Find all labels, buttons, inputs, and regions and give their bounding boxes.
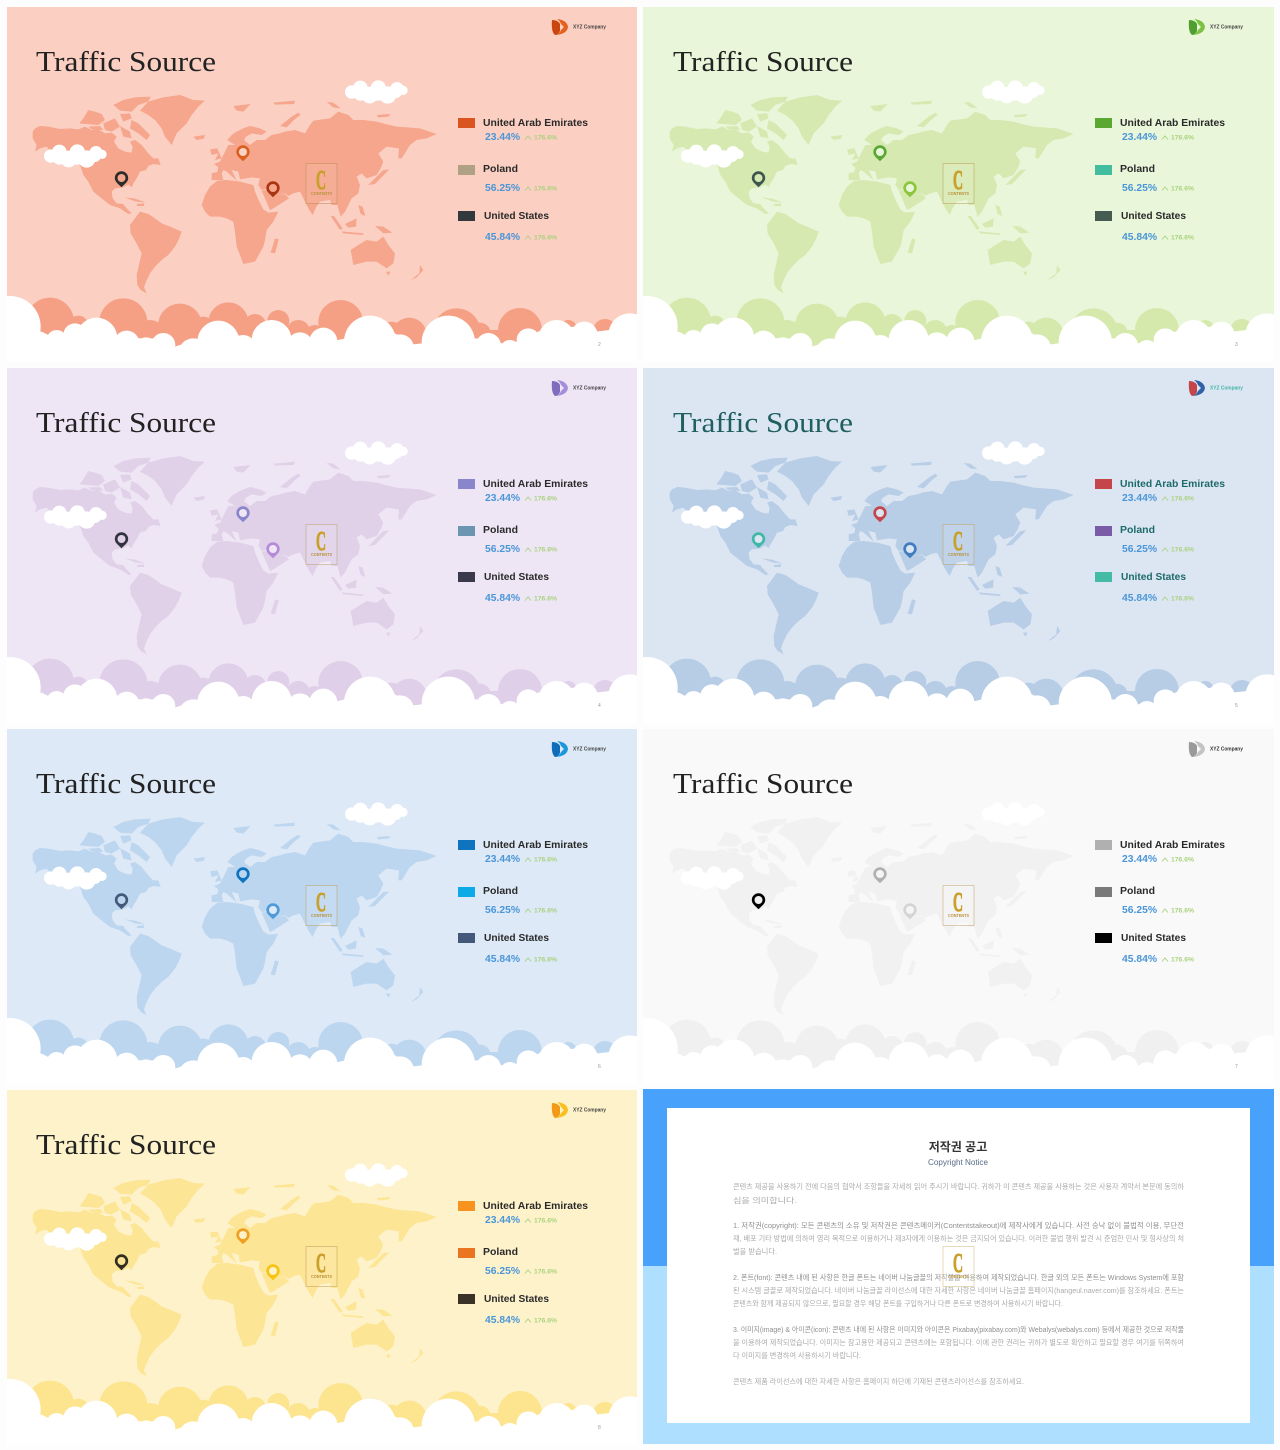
watermark: C bbox=[953, 165, 963, 195]
watermark bbox=[943, 886, 974, 926]
bottom clouds bbox=[0, 1018, 652, 1091]
legend: 56.25% bbox=[485, 904, 521, 916]
copyright body text: 다 이미지를 변경하여 사용하시기 바랍니다. bbox=[733, 1351, 861, 1360]
logo bbox=[1189, 19, 1243, 35]
legend: United Arab Emirates bbox=[1120, 478, 1225, 490]
title: Traffic Source bbox=[673, 768, 853, 800]
pin: United Arab Emirates bbox=[266, 542, 280, 558]
legend: Poland bbox=[1120, 524, 1155, 536]
title: Traffic Source bbox=[673, 407, 853, 439]
small clouds bbox=[44, 1163, 408, 1251]
logo: XYZ Company bbox=[573, 24, 606, 30]
watermark: CONTENTS bbox=[311, 913, 332, 918]
logo: XYZ Company bbox=[1210, 386, 1243, 392]
small clouds bbox=[44, 441, 408, 529]
legend: 176.6% bbox=[534, 496, 558, 502]
legend: 56.25% bbox=[1122, 182, 1158, 194]
legend: Poland bbox=[1120, 885, 1155, 897]
legend: 176.6% bbox=[534, 858, 558, 864]
panel: purple traffic source slide bbox=[0, 368, 652, 730]
copyright heading: 저작권 공고 bbox=[929, 1139, 987, 1154]
legend: 176.6% bbox=[534, 908, 558, 914]
legend: 176.6% bbox=[1171, 858, 1195, 864]
legend: United States bbox=[484, 932, 549, 944]
legend: Poland bbox=[483, 1246, 518, 1258]
legend: United Arab Emirates bbox=[483, 478, 588, 490]
copyright body text: 벌을 받습니다. bbox=[733, 1247, 777, 1256]
page number: 8 bbox=[598, 1425, 601, 1431]
copyright body text: 콘텐츠 제품 라이선스에 대한 자세한 사항은 홈페이지 하단에 기재된 콘텐츠라이선스를 참조하세요. bbox=[733, 1377, 1024, 1386]
legend bbox=[1095, 478, 1225, 604]
legend: United Arab Emirates bbox=[1120, 117, 1225, 129]
panel: green traffic source slide bbox=[616, 7, 1280, 369]
legend: United Arab Emirates bbox=[483, 1200, 588, 1212]
legend: 176.6% bbox=[534, 136, 558, 142]
small clouds bbox=[681, 80, 1045, 168]
title: Traffic Source bbox=[36, 768, 216, 800]
legend bbox=[458, 1200, 588, 1326]
legend: 23.44% bbox=[485, 1214, 521, 1226]
legend: 23.44% bbox=[1122, 492, 1158, 504]
legend: United States bbox=[484, 1293, 549, 1305]
watermark bbox=[306, 1246, 337, 1286]
pin: United Arab Emirates bbox=[903, 542, 917, 558]
logo bbox=[552, 741, 606, 757]
copyright body text: 심을 의미합니다. bbox=[733, 1196, 797, 1205]
watermark: C bbox=[316, 887, 326, 917]
legend: 176.6% bbox=[534, 236, 558, 242]
watermark bbox=[943, 1246, 974, 1286]
legend: 56.25% bbox=[485, 543, 521, 555]
legend: 45.84% bbox=[485, 592, 521, 604]
legend: 176.6% bbox=[534, 1318, 558, 1324]
legend: United States bbox=[1121, 210, 1186, 222]
page number: 2 bbox=[598, 342, 601, 348]
legend: 176.6% bbox=[1171, 236, 1195, 242]
legend: 176.6% bbox=[534, 186, 558, 192]
panel: yellow traffic source slide bbox=[0, 1090, 652, 1450]
logo bbox=[552, 380, 606, 396]
panel: sky blue traffic source slide bbox=[0, 729, 652, 1091]
pin: United Arab Emirates bbox=[266, 903, 280, 919]
legend: United States bbox=[484, 571, 549, 583]
small clouds bbox=[44, 802, 408, 890]
legend: 23.44% bbox=[485, 492, 521, 504]
watermark bbox=[306, 886, 337, 926]
bottom clouds bbox=[0, 296, 652, 369]
panel: copyright notice slide bbox=[643, 1089, 1274, 1444]
watermark: C bbox=[316, 526, 326, 556]
logo bbox=[1189, 380, 1243, 396]
legend: Poland bbox=[1120, 163, 1155, 175]
pin: Poland bbox=[236, 1228, 250, 1244]
watermark: C bbox=[316, 1248, 326, 1278]
pin: United States bbox=[115, 532, 128, 548]
small clouds bbox=[681, 802, 1045, 890]
legend: 45.84% bbox=[485, 1314, 521, 1326]
world map bbox=[670, 456, 1074, 654]
small clouds bbox=[681, 441, 1045, 529]
watermark bbox=[943, 164, 974, 204]
legend: 176.6% bbox=[1171, 548, 1195, 554]
panel: grey traffic source slide bbox=[616, 729, 1280, 1091]
title: Traffic Source bbox=[36, 46, 216, 78]
page number: 7 bbox=[1235, 1064, 1238, 1070]
page number: 6 bbox=[598, 1064, 601, 1070]
legend: 176.6% bbox=[1171, 958, 1195, 964]
logo bbox=[1189, 741, 1243, 757]
watermark: CONTENTS bbox=[948, 552, 969, 557]
legend bbox=[458, 117, 588, 243]
small clouds bbox=[44, 80, 408, 168]
watermark: CONTENTS bbox=[948, 1274, 969, 1279]
watermark: CONTENTS bbox=[948, 191, 969, 196]
bottom clouds bbox=[616, 657, 1280, 730]
watermark bbox=[306, 164, 337, 204]
legend bbox=[1095, 117, 1225, 243]
copyright body text bbox=[733, 1182, 1184, 1386]
pin: United States bbox=[115, 893, 128, 909]
pin: Poland bbox=[236, 867, 250, 883]
legend bbox=[1095, 839, 1225, 965]
logo bbox=[552, 1102, 606, 1118]
pin: United States bbox=[752, 893, 765, 909]
logo: XYZ Company bbox=[573, 1108, 606, 1114]
legend: Poland bbox=[483, 885, 518, 897]
legend: 45.84% bbox=[1122, 953, 1158, 965]
watermark: CONTENTS bbox=[311, 191, 332, 196]
legend: 45.84% bbox=[485, 231, 521, 243]
bottom clouds bbox=[0, 1379, 652, 1450]
logo: XYZ Company bbox=[1210, 746, 1243, 752]
legend: United Arab Emirates bbox=[1120, 839, 1225, 851]
world map bbox=[33, 456, 437, 654]
legend: 176.6% bbox=[1171, 186, 1195, 192]
bottom clouds bbox=[0, 657, 652, 730]
legend: 56.25% bbox=[485, 182, 521, 194]
pin: United Arab Emirates bbox=[266, 181, 280, 197]
pin: United States bbox=[752, 532, 765, 548]
copyright body text: 을 이용하여 제작되었습니다. 이미지는 참고용만 제공되고 콘텐츠에는 포함됩니다. 이에 관한 권리는 귀하가 별도로 확인하고 필요할 경우 여기를 뒤쪽하여 bbox=[733, 1338, 1184, 1347]
legend: 56.25% bbox=[485, 1265, 521, 1277]
watermark bbox=[306, 524, 337, 564]
legend: United States bbox=[484, 210, 549, 222]
copyright body text: 된 시스템 글꼴로 제작되었습니다. 네이버 나눔글꼴 라이선스에 대한 자세한 사항은 네이버 나눔글꼴 홈페이지(hangeul.naver.com)를 참조하세요. 폰트는 bbox=[733, 1286, 1184, 1295]
legend: 56.25% bbox=[1122, 904, 1158, 916]
legend: 176.6% bbox=[534, 596, 558, 602]
copyright body text: 재, 배포 기타 방법에 의하여 영리 목적으로 이용하거나 제3자에게 이용하는 것은 금지되어 있습니다. 이러한 불법 행위 발견 시 준엄한 민사 및 형사상의 처 bbox=[733, 1234, 1184, 1243]
page number: 4 bbox=[598, 703, 601, 709]
page number: 3 bbox=[1235, 342, 1238, 348]
copyright body text: 콘텐츠 제공을 사용하기 전에 다음의 협약서 조항들을 자세히 읽어 주시기 바랍니다. 귀하가 이 콘텐츠 제공을 사용하는 것은 사용자 계약서 본문에 동의하 bbox=[733, 1182, 1184, 1191]
watermark bbox=[943, 524, 974, 564]
watermark: C bbox=[953, 1248, 963, 1278]
world map bbox=[33, 817, 437, 1015]
pin: United Arab Emirates bbox=[903, 181, 917, 197]
world map bbox=[33, 95, 437, 293]
legend: 45.84% bbox=[485, 953, 521, 965]
title: Traffic Source bbox=[36, 1129, 216, 1161]
pin: United States bbox=[115, 1254, 128, 1270]
legend: 176.6% bbox=[534, 1218, 558, 1224]
legend: 176.6% bbox=[1171, 136, 1195, 142]
watermark: C bbox=[316, 165, 326, 195]
legend: United States bbox=[1121, 932, 1186, 944]
copyright body text: 2. 폰트(font): 콘텐츠 내에 된 사항은 한글 폰트는 네이버 나눔글꼴의 저작물을 이용하여 제작되었습니다. 한글 외의 모든 폰트는 Windows System에 포함 bbox=[733, 1273, 1184, 1282]
legend: 176.6% bbox=[1171, 908, 1195, 914]
copyright subheading: Copyright Notice bbox=[928, 1158, 989, 1167]
legend: 56.25% bbox=[1122, 543, 1158, 555]
legend: 176.6% bbox=[1171, 496, 1195, 502]
pin: Poland bbox=[873, 145, 887, 161]
world map bbox=[670, 95, 1074, 293]
watermark: CONTENTS bbox=[311, 552, 332, 557]
legend: 176.6% bbox=[534, 548, 558, 554]
legend: 45.84% bbox=[1122, 231, 1158, 243]
pin: United States bbox=[752, 171, 765, 187]
legend: 23.44% bbox=[485, 131, 521, 143]
copyright body text: 3. 이미지(image) & 아이콘(icon): 콘텐츠 내에 된 사항은 이미지와 아이콘은 Pixabay(pixabay.com)와 Webalys(webalys.com) 등에서 제공한 것으로 저작물 bbox=[733, 1325, 1184, 1334]
pin: Poland bbox=[236, 506, 250, 522]
watermark: CONTENTS bbox=[948, 913, 969, 918]
legend: United Arab Emirates bbox=[483, 839, 588, 851]
pin: Poland bbox=[873, 506, 887, 522]
world map bbox=[33, 1178, 437, 1376]
pin: Poland bbox=[873, 867, 887, 883]
logo bbox=[552, 19, 606, 35]
logo: XYZ Company bbox=[573, 386, 606, 392]
bottom clouds bbox=[616, 296, 1280, 369]
watermark: C bbox=[953, 526, 963, 556]
watermark: CONTENTS bbox=[311, 1274, 332, 1279]
pin: United States bbox=[115, 171, 128, 187]
legend: United States bbox=[1121, 571, 1186, 583]
panel: salmon traffic source slide bbox=[0, 7, 652, 369]
legend bbox=[458, 478, 588, 604]
pin: Poland bbox=[236, 145, 250, 161]
logo: XYZ Company bbox=[573, 746, 606, 752]
legend bbox=[458, 839, 588, 965]
world map bbox=[670, 817, 1074, 1015]
pin: United Arab Emirates bbox=[266, 1264, 280, 1280]
legend: 23.44% bbox=[1122, 853, 1158, 865]
copyright body text: 콘텐츠와 함께 제공되지 않으므로, 필요할 경우 해당 폰트를 구입하거나 다른 폰트로 변경하여 사용하시기 바랍니다. bbox=[733, 1299, 1063, 1308]
watermark: C bbox=[953, 887, 963, 917]
legend: 45.84% bbox=[1122, 592, 1158, 604]
copyright body text: 1. 저작권(copyright): 모든 콘텐츠의 소유 및 저작권은 콘텐츠메이커(Contentstakeout)에 제작사에게 있습니다. 사전 승낙 없이 불법적 이용, 무단전 bbox=[733, 1221, 1184, 1230]
legend: 176.6% bbox=[534, 1270, 558, 1276]
bottom clouds bbox=[616, 1018, 1280, 1091]
legend: 176.6% bbox=[1171, 596, 1195, 602]
panel: steel blue traffic source slide bbox=[616, 368, 1280, 730]
pin: United Arab Emirates bbox=[903, 903, 917, 919]
title: Traffic Source bbox=[673, 46, 853, 78]
title: Traffic Source bbox=[36, 407, 216, 439]
legend: 23.44% bbox=[485, 853, 521, 865]
legend: Poland bbox=[483, 524, 518, 536]
legend: Poland bbox=[483, 163, 518, 175]
page number: 5 bbox=[1235, 703, 1238, 709]
legend: United Arab Emirates bbox=[483, 117, 588, 129]
legend: 23.44% bbox=[1122, 131, 1158, 143]
logo: XYZ Company bbox=[1210, 24, 1243, 30]
legend: 176.6% bbox=[534, 958, 558, 964]
